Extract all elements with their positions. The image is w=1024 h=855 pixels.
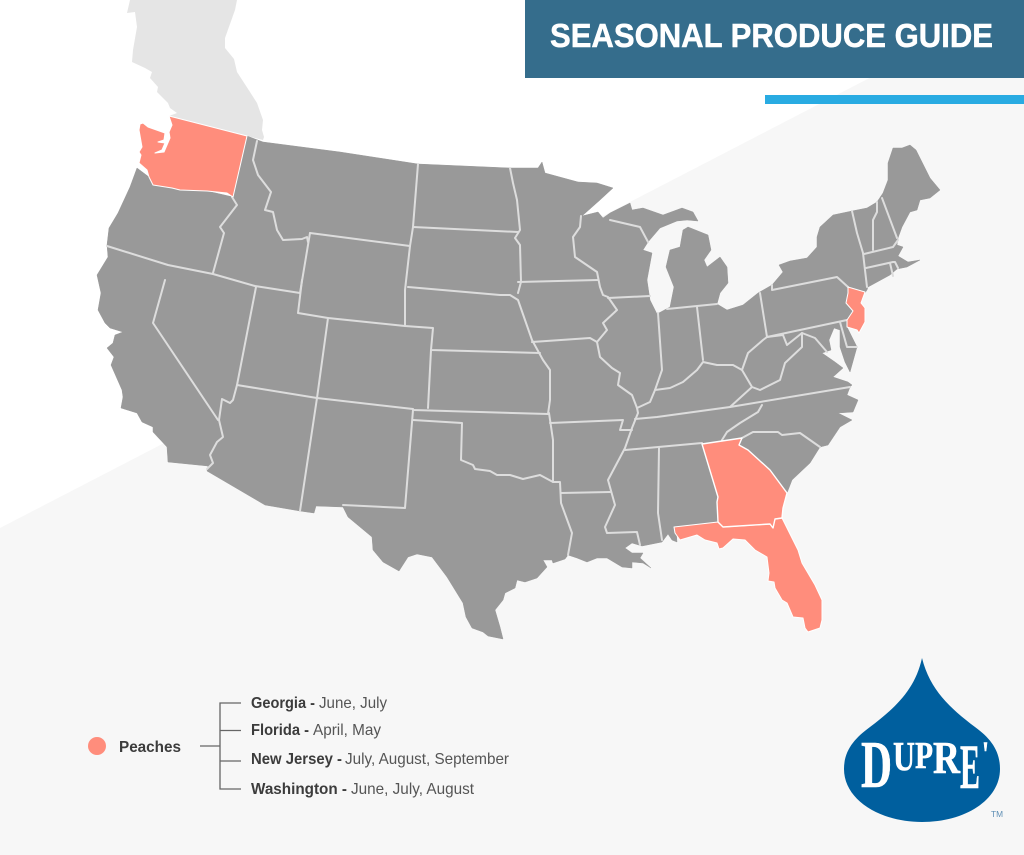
map: Canada landmass bbox=[127, 0, 264, 140]
state: New Jersey highlighted bbox=[846, 287, 865, 333]
logo wordmark bbox=[861, 728, 989, 802]
title banner bbox=[525, 0, 1024, 78]
logo wordmark: P bbox=[915, 735, 933, 777]
logo drop shape bbox=[844, 658, 1000, 822]
state: Florida highlighted bbox=[674, 518, 822, 632]
map: contiguous United States bbox=[97, 136, 940, 639]
state borders bbox=[107, 141, 898, 555]
entry: Georgia bbox=[251, 695, 387, 712]
accent bar bbox=[765, 95, 1024, 104]
logo wordmark: D bbox=[861, 728, 892, 802]
trademark: TM bbox=[991, 809, 1003, 819]
land outline bbox=[97, 136, 940, 639]
logo wordmark: U bbox=[893, 733, 915, 779]
bracket connector bbox=[200, 703, 241, 789]
entry: Florida: Florida - bbox=[251, 722, 309, 739]
legend marker bbox=[88, 737, 106, 755]
state: Georgia highlighted bbox=[702, 438, 787, 528]
title: SEASONAL PRODUCE GUIDE bbox=[550, 18, 993, 55]
logo: Dupre' drop bbox=[844, 658, 1003, 822]
logo wordmark: E bbox=[960, 731, 980, 802]
logo wordmark: R bbox=[933, 733, 960, 783]
entry: Washington: Washington - bbox=[251, 781, 347, 798]
legend: Peaches bbox=[88, 695, 510, 798]
state: Washington highlighted bbox=[139, 116, 247, 197]
logo wordmark: ' bbox=[982, 734, 989, 774]
entry: New Jersey bbox=[251, 751, 510, 768]
entry: Washington: June, July, August bbox=[351, 781, 475, 798]
entry: New Jersey: July, August, September bbox=[345, 751, 510, 768]
entry: Georgia: Georgia - bbox=[251, 695, 315, 712]
entry: Georgia: June, July bbox=[319, 695, 387, 712]
entry: Florida bbox=[251, 722, 381, 739]
legend label: Peaches bbox=[119, 739, 181, 756]
entry: New Jersey: New Jersey - bbox=[251, 751, 342, 768]
entry: Florida: April, May bbox=[313, 722, 381, 739]
entry: Washington bbox=[251, 781, 475, 798]
